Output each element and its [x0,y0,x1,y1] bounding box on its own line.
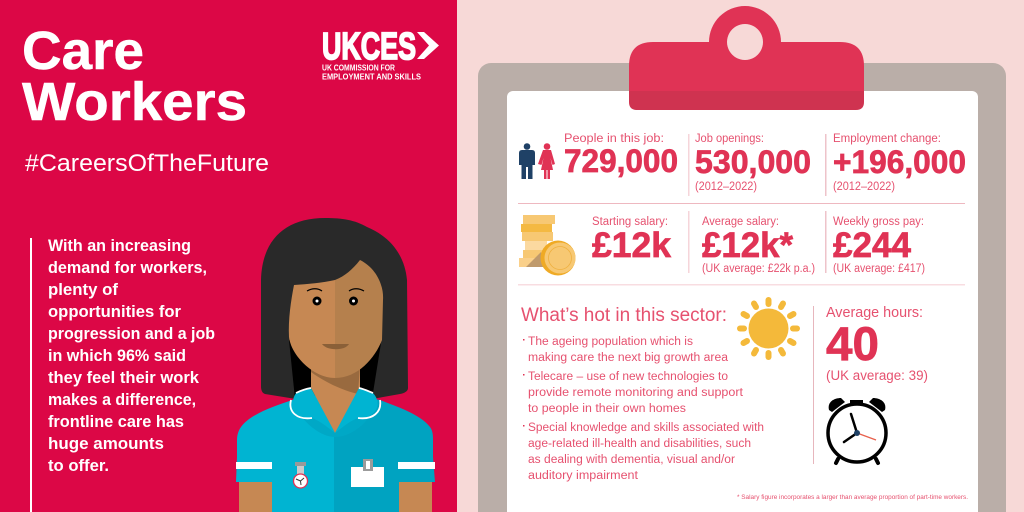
neck [311,365,360,433]
logo: UKCES: UKCES [322,26,416,68]
logo: UKCES: EMPLOYMENT AND SKILLS [322,72,421,82]
intro text block: plenty of [48,281,119,299]
sleeve stripes [236,462,435,469]
icon: man and woman [519,143,555,179]
logo: UKCES [322,26,439,82]
stat: job openings: Job openings: [695,133,764,145]
list: what's hot bullets: Telecare – use of new technologies to [528,371,728,383]
stat: average hours: (UK average: 39) [826,368,928,383]
hair back [261,218,408,399]
collar [293,388,378,433]
illustration: nurse [236,218,435,512]
intro text block: makes a difference, [48,391,196,409]
stat: people in this job: 729,000 [564,143,678,179]
icon: coins [519,215,576,276]
stat: average salary [702,216,815,275]
hashtag: #CareersOfTheFuture [25,150,269,177]
list: what's hot bullets: Special knowledge and skills associated with [528,422,764,434]
intro text block: opportunities for [48,303,182,321]
arms [239,480,432,512]
clipboard board [478,63,1006,512]
stat: weekly gross pay: (UK average: £417) [833,263,925,275]
list: what's hot bullets: The ageing population which is [528,336,693,348]
stat: average salary: (UK average: £22k p.a.) [702,263,815,275]
intro text block: demand for workers, [48,259,207,277]
name badge [351,459,384,487]
stat: employment change [833,133,966,193]
panel: left red background [0,0,457,512]
stat: average hours: 40 [826,317,879,370]
logo: UKCES: UK COMMISSION FOR [322,62,395,72]
intro text block: they feel their work [48,369,200,387]
stat: job openings [695,133,811,193]
collar trim [290,388,380,418]
dividers [518,134,965,464]
list: what's hot bullets: provide remote monitoring and support [528,387,744,399]
intro text block: in which 96% said [48,347,186,365]
stat: average hours: Average hours: [826,305,923,321]
stat: weekly gross pay: £244 [833,226,912,265]
stat: job openings: (2012–2022) [695,181,757,193]
eyes [307,289,364,306]
stat: average salary: Average salary: [702,216,779,228]
face [289,280,335,378]
intro text block [30,237,215,512]
stat: employment change: (2012–2022) [833,181,895,193]
title [22,21,247,132]
list: what's hot bullets: age-related ill-health and disabilities, such [528,438,751,450]
heading: what's hot: What’s hot in this sector: [521,305,727,326]
title: Care [22,21,144,81]
list: what's hot bullets: making care the next big growth area [528,352,729,364]
mouth [322,344,349,349]
stat: weekly gross pay: Weekly gross pay: [833,216,924,228]
title: Workers [22,72,247,132]
intro text block: progression and a job [48,325,215,343]
tunic shading under collar [301,416,370,437]
stat: weekly gross pay [833,216,925,275]
list: what's hot bullets: to people in their own homes [528,403,686,415]
intro text block: to offer. [48,457,109,475]
stat: average salary: £12k* [702,226,793,265]
fob watch [294,462,308,488]
icon: sun [740,300,797,357]
stat: average hours [826,305,928,383]
stat: job openings: 530,000 [695,144,811,180]
intro text block: With an increasing [48,237,191,255]
intro text block: huge amounts [48,435,164,453]
list: what's hot bullets: auditory impairment [528,470,639,482]
list: what's hot bullets [523,336,764,482]
tunic [236,392,336,512]
icon: alarm clock [828,398,886,463]
stat: employment change: +196,000 [833,144,966,180]
list: what's hot bullets: as dealing with dementia, visual and/or [528,454,735,466]
stat: people in this job: People in this job: [564,133,664,145]
paper sheet [507,91,978,512]
stat: starting salary: Starting salary: [592,216,668,228]
clipboard clip [629,6,864,110]
intro text block: frontline care has [48,413,184,431]
stat: starting salary: £12k [592,226,672,265]
stat: employment change: Employment change: [833,133,941,145]
footnote: * Salary figure incorporates a larger than average proportion of part-time workers. [737,494,968,501]
